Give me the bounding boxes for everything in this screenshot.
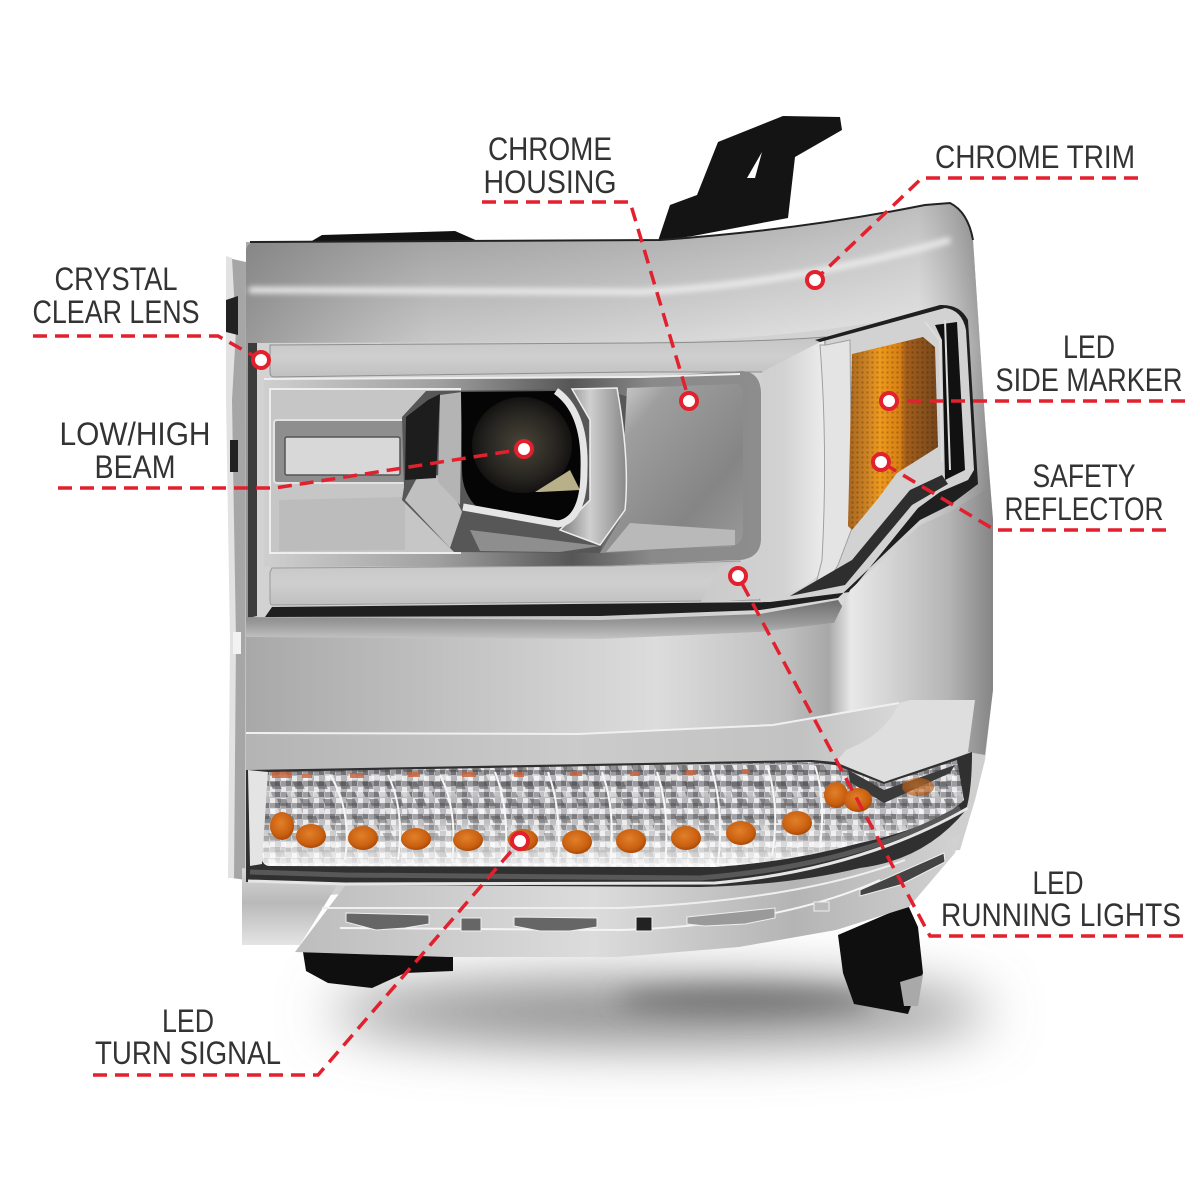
label: chrome trim: CHROME TRIM	[935, 139, 1135, 175]
label: LED turn signal: TURN SIGNAL	[95, 1035, 281, 1071]
lower chrome skirt	[242, 868, 340, 945]
marker: LED side marker	[881, 393, 897, 409]
facet dividers	[330, 766, 822, 866]
callout: chrome housing	[482, 131, 697, 409]
label: LED running lights	[941, 865, 1181, 933]
right inner panel	[600, 384, 743, 553]
right lens section	[700, 340, 828, 603]
label: crystal clear lens: CRYSTAL	[54, 261, 178, 297]
top mounting bracket	[658, 116, 842, 241]
middle chrome bumper section	[246, 490, 993, 770]
lens inner surface	[248, 305, 976, 618]
leader line: safety reflector	[881, 462, 1166, 530]
label: low/high beam: LOW/HIGH	[60, 416, 210, 452]
label: chrome housing	[484, 131, 616, 200]
callout: crystal clear lens	[32, 261, 269, 368]
label: chrome housing: HOUSING	[484, 164, 616, 200]
callout: LED turn signal	[93, 833, 528, 1075]
bottom light strip	[270, 561, 760, 605]
label: chrome housing: CHROME	[488, 131, 612, 167]
leader line: LED running lights	[738, 576, 1183, 936]
callout: chrome trim	[807, 139, 1138, 288]
bottom left mount	[303, 952, 453, 988]
bezel slots	[346, 853, 945, 931]
marker: LED turn signal	[512, 833, 528, 849]
label: LED side marker: LED	[1063, 329, 1115, 365]
label: safety reflector: SAFETY	[1032, 458, 1136, 494]
chrome housing body	[245, 203, 993, 895]
projector surround ring	[264, 371, 761, 567]
top orange flecks	[272, 769, 750, 778]
marker: chrome trim	[807, 272, 823, 288]
rear black housing, top	[305, 231, 487, 245]
marker: chrome housing	[681, 393, 697, 409]
side marker amber lens	[848, 337, 938, 530]
marker: low/high beam	[516, 441, 532, 457]
label: safety reflector: REFLECTOR	[1004, 491, 1164, 527]
label: LED side marker	[996, 329, 1182, 398]
leader line: crystal clear lens	[33, 336, 261, 360]
amber LEDs	[270, 778, 934, 854]
callout: LED side marker	[881, 329, 1185, 409]
upper chrome strip below lens	[246, 600, 846, 639]
side marker black trim	[265, 305, 978, 617]
leader line: LED side marker	[889, 399, 1185, 403]
callout: safety reflector	[873, 454, 1166, 530]
callout: low/high beam	[58, 416, 532, 488]
leader line: low/high beam	[58, 449, 524, 488]
marker: crystal clear lens	[253, 352, 269, 368]
inner recess: left panel	[270, 389, 460, 553]
bottom right mount	[838, 905, 923, 1014]
label: crystal clear lens: CLEAR LENS	[32, 294, 200, 330]
projector lens	[461, 391, 584, 524]
label: low/high beam: BEAM	[94, 449, 176, 485]
leader line: chrome trim	[815, 178, 1138, 280]
label: LED running lights: LED	[1032, 865, 1084, 901]
LED signal strip housing	[246, 752, 972, 887]
DRL block	[274, 420, 406, 483]
label: LED turn signal	[95, 1003, 281, 1071]
callout: LED running lights	[730, 568, 1183, 936]
top chrome band	[246, 203, 993, 620]
marker: LED running lights	[730, 568, 746, 584]
reflector chrome	[402, 389, 640, 553]
label: LED turn signal: LED	[162, 1003, 214, 1039]
leader line: LED turn signal	[93, 841, 520, 1075]
marker: safety reflector	[873, 454, 889, 470]
label: crystal clear lens	[32, 261, 200, 330]
label: low/high beam	[60, 416, 210, 485]
lower bezel	[295, 835, 960, 957]
left edge trim	[226, 256, 246, 880]
ground shadow	[330, 982, 990, 1042]
crease chrome fin	[246, 703, 899, 770]
label: safety reflector	[1004, 458, 1164, 527]
headlight assembly	[226, 116, 993, 1014]
top light strip	[270, 337, 825, 377]
leader line: chrome housing	[482, 202, 689, 400]
projector collar	[560, 388, 626, 545]
